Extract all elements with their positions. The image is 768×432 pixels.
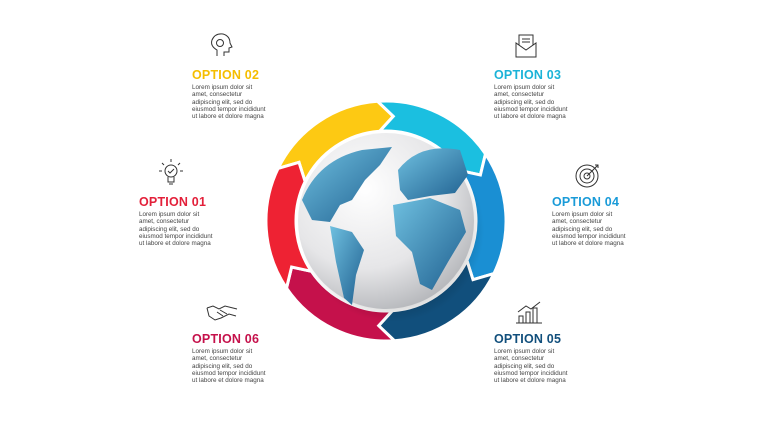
arrow: navy — [379, 260, 494, 341]
globe — [298, 133, 484, 322]
block: option 02: eiusmod tempor incididunt — [192, 106, 266, 113]
block: option 06: OPTION 06 — [192, 332, 259, 346]
block: option 06: adipiscing elit, sed do — [192, 363, 252, 370]
block: option 01 — [139, 195, 213, 247]
block: option 04: eiusmod tempor incididunt — [552, 233, 626, 240]
block: option 03 — [494, 68, 568, 120]
block: option 06 — [192, 332, 266, 384]
icon: target — [576, 164, 598, 188]
block: option 03: amet, consectetur — [494, 91, 544, 98]
block: option 05: Lorem ipsum dolor sit — [494, 348, 554, 355]
block: option 01: OPTION 01 — [139, 195, 206, 209]
block: option 03: Lorem ipsum dolor sit — [494, 84, 554, 91]
block: option 06: amet, consectetur — [192, 355, 242, 362]
icon: lightbulb — [159, 159, 183, 184]
icon: bar chart — [516, 302, 542, 324]
arrow: blue — [461, 154, 506, 280]
block: option 02: OPTION 02 — [192, 68, 259, 82]
block: option 05 — [494, 332, 568, 384]
block: option 04: OPTION 04 — [552, 195, 619, 209]
block: option 01: amet, consectetur — [139, 218, 189, 225]
block: option 02 — [192, 68, 266, 120]
block: option 05: eiusmod tempor incididunt — [494, 370, 568, 377]
block: option 01: adipiscing elit, sed do — [139, 226, 199, 233]
icon: gear head — [211, 33, 233, 56]
block: option 06: eiusmod tempor incididunt — [192, 370, 266, 377]
block: option 06: Lorem ipsum dolor sit — [192, 348, 252, 355]
block: option 05: amet, consectetur — [494, 355, 544, 362]
block: option 04 — [552, 195, 626, 247]
arrow: yellow — [278, 101, 393, 182]
block: option 03: OPTION 03 — [494, 68, 561, 82]
icon: envelope — [516, 34, 536, 58]
block: option 04: ut labore et dolore magna — [552, 240, 624, 247]
block: option 05: OPTION 05 — [494, 332, 561, 346]
block: option 04: amet, consectetur — [552, 218, 602, 225]
block: option 04: Lorem ipsum dolor sit — [552, 211, 612, 218]
block: option 02: ut labore et dolore magna — [192, 113, 264, 120]
block: option 01: eiusmod tempor incididunt — [139, 233, 213, 240]
arrow: cyan — [378, 101, 486, 175]
block: option 04: adipiscing elit, sed do — [552, 226, 612, 233]
arrow: crimson — [286, 267, 394, 341]
icon: handshake — [206, 306, 238, 320]
block: option 05: adipiscing elit, sed do — [494, 363, 554, 370]
block: option 01: Lorem ipsum dolor sit — [139, 211, 199, 218]
block: option 02: Lorem ipsum dolor sit — [192, 84, 252, 91]
block: option 02: amet, consectetur — [192, 91, 242, 98]
block: option 06: ut labore et dolore magna — [192, 377, 264, 384]
block: option 01: ut labore et dolore magna — [139, 240, 211, 247]
arrow: red — [266, 162, 311, 288]
block: option 02: adipiscing elit, sed do — [192, 99, 252, 106]
block: option 03: adipiscing elit, sed do — [494, 99, 554, 106]
block: option 05: ut labore et dolore magna — [494, 377, 566, 384]
block: option 03: eiusmod tempor incididunt — [494, 106, 568, 113]
block: option 03: ut labore et dolore magna — [494, 113, 566, 120]
